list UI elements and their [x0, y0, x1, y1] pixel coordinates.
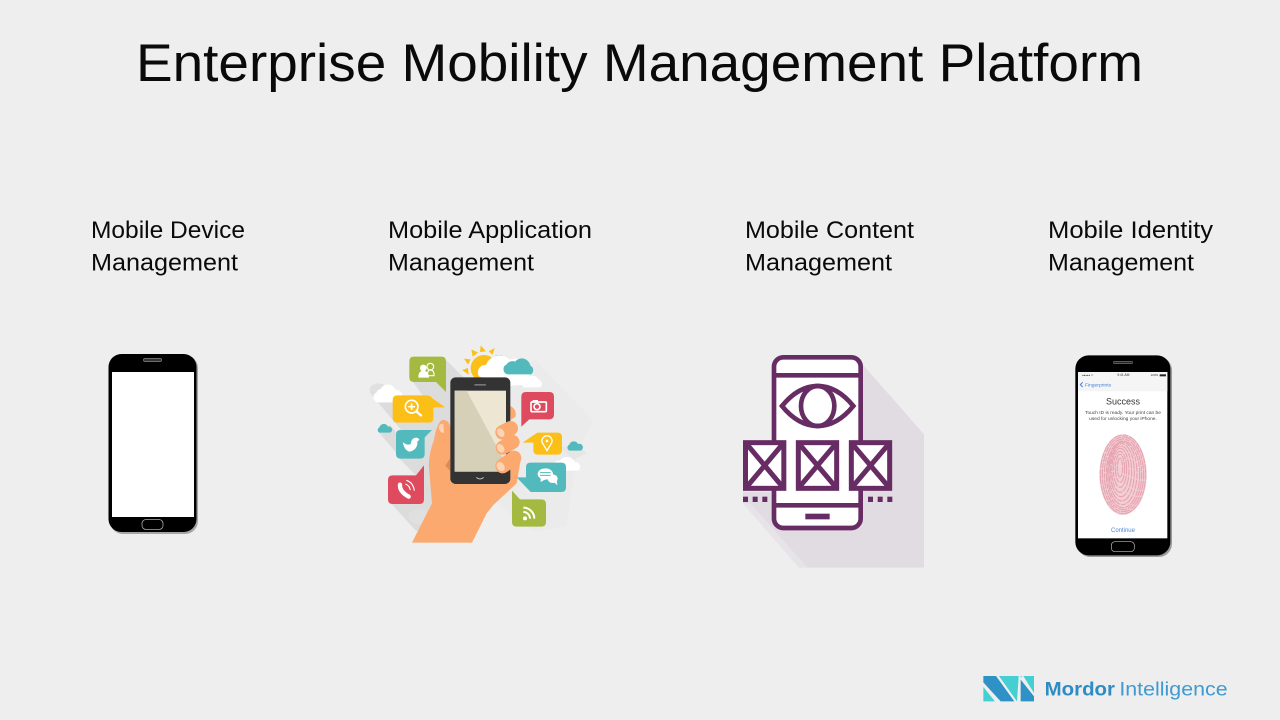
screen text: Touch ID is ready. Your print can be — [1085, 410, 1161, 416]
dots — [743, 497, 892, 502]
heading: mobile content management: Mobile Content — [745, 217, 914, 244]
bubble: location pin, yellow — [523, 433, 562, 455]
screen text: Continue — [1111, 528, 1136, 534]
heading: mobile identity management: Management — [1048, 250, 1194, 276]
phone body — [450, 377, 510, 484]
fingers — [503, 428, 514, 466]
panel: mobile device management — [91, 217, 245, 534]
bubble: bird, teal — [396, 430, 432, 459]
screen text: 9:41 AM — [1117, 373, 1130, 377]
panel: mobile application management — [370, 217, 593, 543]
content boxes — [745, 443, 890, 488]
heading: mobile application management: Mobile Application — [388, 217, 592, 244]
screen text: Success — [1106, 396, 1140, 406]
heading: mobile identity management — [1048, 217, 1213, 276]
phone body — [774, 357, 861, 528]
heading: mobile device management: Management — [91, 250, 238, 276]
near shadows — [370, 360, 587, 532]
logo wordmark: Intelligence — [1119, 679, 1228, 701]
logo wordmark: Mordor — [1045, 679, 1115, 701]
bubble: camera, red — [521, 392, 554, 427]
bubble: rss, green — [512, 491, 546, 527]
long shadow — [743, 365, 924, 568]
bubble: people, green — [409, 357, 446, 392]
panel: mobile identity management — [1048, 217, 1213, 557]
panel: mobile content management — [743, 217, 924, 568]
heading: mobile application management — [388, 217, 592, 276]
logo wordmark — [1045, 679, 1228, 701]
title: Enterprise Mobility Management Platform — [136, 34, 1143, 93]
logo mark — [983, 676, 1034, 701]
icon: smartphone with fingerprint screen — [1075, 355, 1172, 557]
screen text: Fingerprints — [1085, 382, 1112, 388]
heading: mobile identity management: Mobile Identity — [1048, 217, 1213, 244]
heading: mobile content management: Management — [745, 250, 892, 276]
heading: mobile device management: Mobile Device — [91, 217, 245, 244]
screen text: 100% — [1151, 373, 1158, 377]
screen text: used for unlocking your iPhone. — [1089, 416, 1157, 422]
screen text: ●●●●● ᯤ — [1082, 374, 1094, 377]
logo: Mordor Intelligence — [983, 676, 1228, 701]
sun — [462, 345, 503, 382]
icon: phone with eye and content boxes — [743, 357, 924, 568]
icon: hand holding phone with app bubbles — [370, 345, 593, 543]
bubble: magnifier, yellow — [393, 395, 445, 423]
screen text — [1082, 373, 1161, 534]
fingerprint — [1099, 434, 1147, 515]
heading: mobile content management — [745, 217, 914, 276]
hand — [412, 420, 521, 543]
bubble: phone, red — [388, 465, 424, 504]
icon: blank smartphone — [108, 354, 198, 534]
bubble: chat, teal — [517, 463, 566, 492]
eye — [782, 386, 853, 426]
clouds — [370, 383, 428, 524]
heading: mobile application management: Management — [388, 250, 534, 276]
faint far shadows — [410, 360, 593, 537]
heading: mobile device management — [91, 217, 245, 276]
